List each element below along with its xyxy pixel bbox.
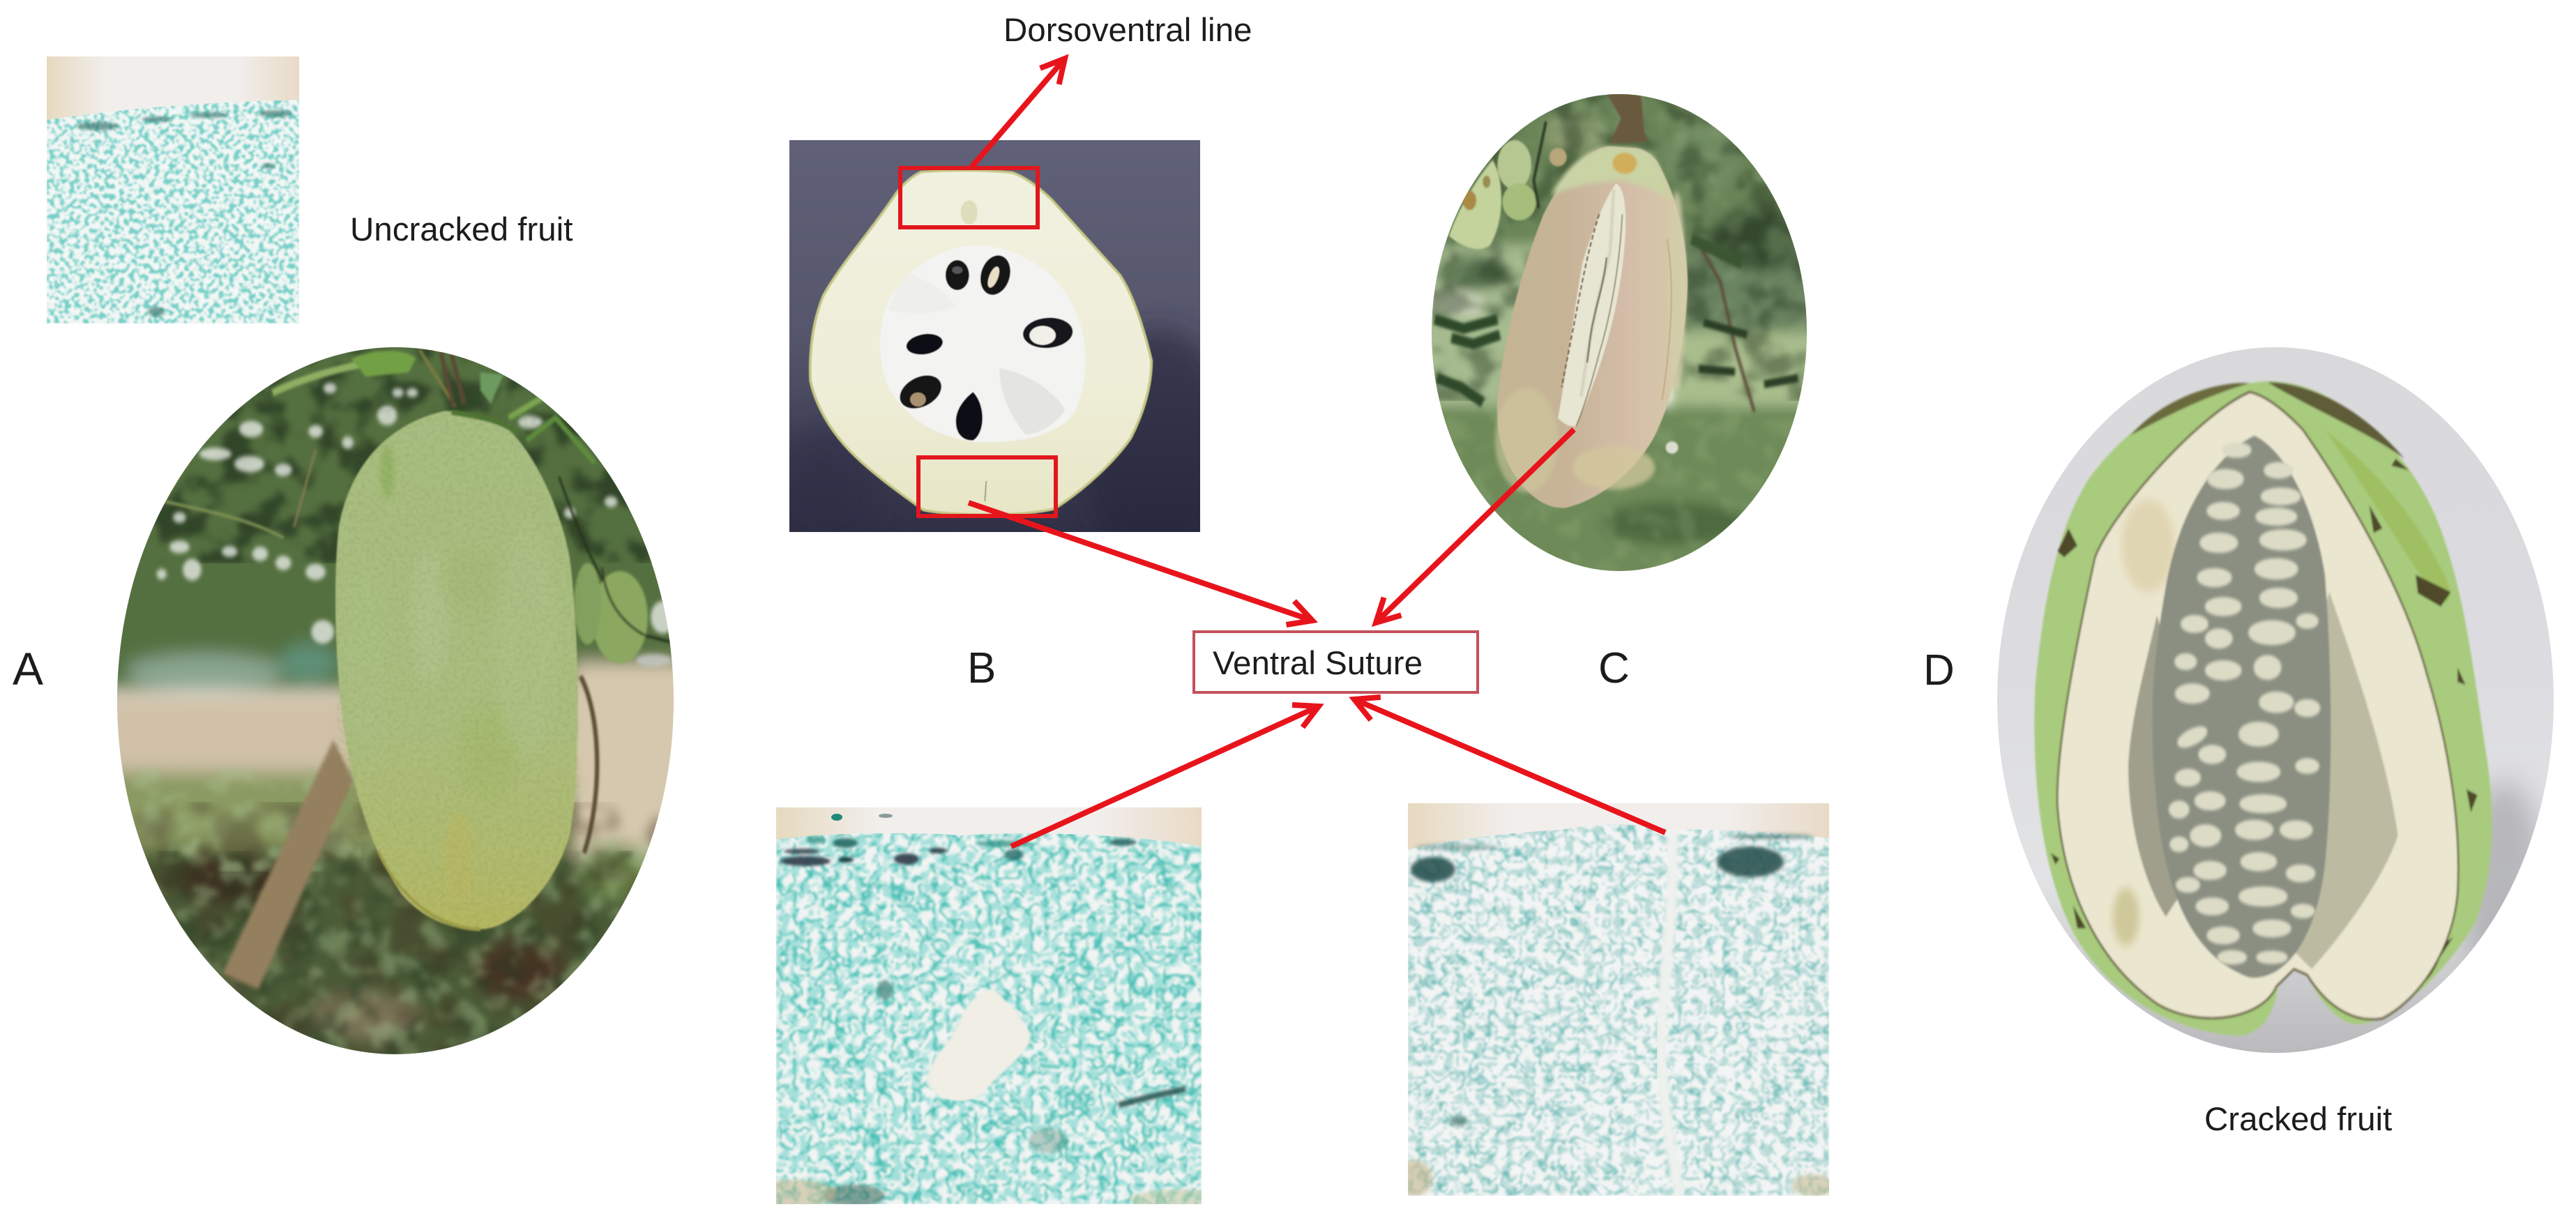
panel B: cross-section and micrographs — [753, 140, 1834, 1209]
fruit body — [1495, 146, 1688, 508]
tree trunk — [222, 740, 353, 989]
panel C: partially cracked fruit — [1420, 78, 1832, 692]
panel A letter: A — [13, 643, 43, 694]
callout: ventral suture — [1194, 632, 1478, 692]
seeds — [894, 252, 1074, 441]
arrow: dorsal box to dorsoventral line — [971, 59, 1065, 168]
micrograph: uncracked fruit section — [42, 49, 303, 324]
label: dorsoventral line: Dorsoventral line — [1003, 12, 1252, 49]
green rind — [2034, 381, 2492, 1035]
micrograph: ventral section with void — [753, 802, 1227, 1209]
micrograph: ventral section with crack — [1396, 798, 1834, 1197]
stem — [1604, 89, 1648, 143]
crack through tissue — [1661, 830, 1681, 1196]
panel D: cracked fruit — [1923, 345, 2556, 1138]
fruit flesh — [810, 170, 1151, 515]
foliage mottling — [153, 348, 651, 563]
label: uncracked fruit: Uncracked fruit — [350, 211, 573, 248]
label: cracked fruit: Cracked fruit — [2204, 1101, 2392, 1138]
right cavity — [2236, 592, 2398, 969]
highlight: dorsal region box — [900, 168, 1038, 227]
cream flesh — [2057, 392, 2458, 1019]
small background fruit — [574, 563, 648, 664]
split opening — [1558, 183, 1626, 426]
seeds — [2170, 444, 2319, 963]
photo: fruit splitting on tree — [1420, 78, 1832, 591]
core cavities — [889, 274, 955, 313]
leaves along top — [271, 361, 359, 397]
panel D letter: D — [1923, 646, 1955, 694]
panel A: uncracked fruit — [13, 49, 709, 1084]
fruit body — [335, 411, 578, 929]
arrow: right micrograph to ventral suture — [1354, 697, 1665, 833]
white core — [880, 245, 1085, 442]
foliage mottling — [1432, 94, 1807, 401]
background fruit — [1449, 160, 1501, 249]
void in tissue — [927, 989, 1030, 1101]
left cavity — [2128, 615, 2219, 917]
photo: fully cracked fruit — [1994, 345, 2556, 1056]
arrow: ventral box to ventral suture — [969, 503, 1312, 625]
panel C letter: C — [1598, 644, 1630, 692]
photo: uncracked fruit on tree — [117, 347, 674, 1054]
arrow: split fruit to ventral suture — [1376, 430, 1574, 623]
photo: fruit cross-section — [789, 140, 1200, 532]
panel B letter: B — [967, 644, 996, 692]
highlight: ventral region box — [918, 457, 1056, 516]
seed mass — [2152, 436, 2331, 978]
callout: ventral suture: Ventral Suture — [1213, 645, 1423, 682]
arrow: left micrograph to ventral suture — [1011, 705, 1319, 846]
